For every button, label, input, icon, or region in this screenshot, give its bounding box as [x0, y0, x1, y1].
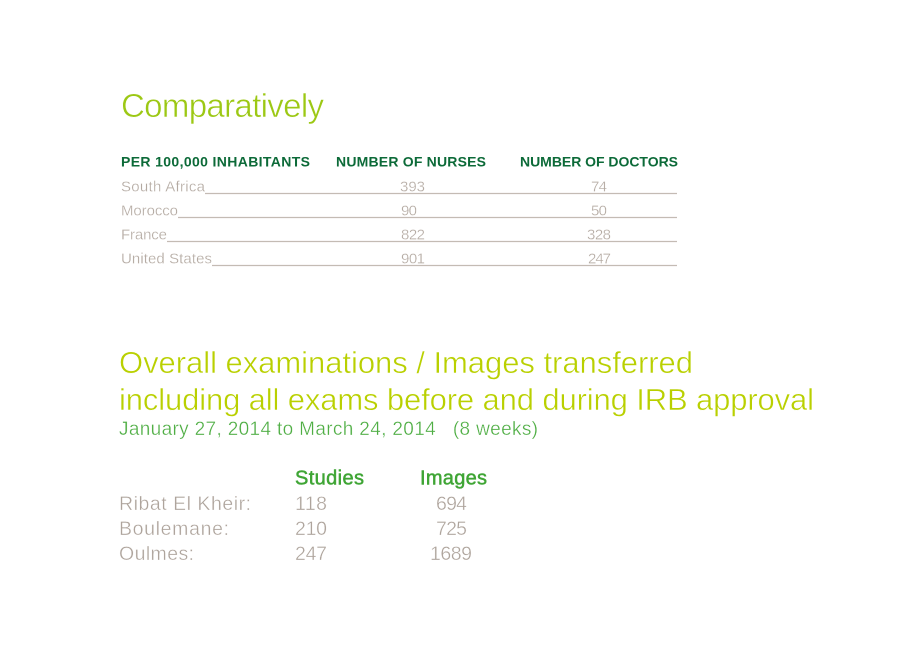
table header row: NUMBER OF NURSES	[336, 154, 486, 170]
row: United States: 247	[588, 250, 611, 268]
heading: overall examinations	[119, 345, 814, 417]
row: Morocco: 50	[591, 202, 607, 220]
row: Morocco	[121, 202, 677, 220]
row: South Africa	[121, 178, 677, 196]
row: Boulemane	[119, 518, 467, 540]
row: Oulmes: 247	[295, 543, 327, 565]
row: South Africa: 393	[400, 178, 425, 196]
table header row: NUMBER OF DOCTORS	[520, 154, 678, 170]
title: Comparatively: Comparatively	[121, 87, 324, 124]
table header row: Images	[420, 468, 487, 490]
table header row	[295, 468, 487, 490]
row: South Africa: 74	[591, 178, 607, 196]
row: Oulmes	[119, 543, 472, 565]
table: studies and images by site	[119, 468, 487, 565]
row: France: 822	[401, 226, 425, 244]
row: France	[121, 226, 677, 244]
table header row: PER 100,000 INHABITANTS	[121, 154, 310, 170]
row: United States: 901	[401, 250, 425, 268]
subheading: date range: January 27, 2014 to March 24, 2014 (8 weeks)	[119, 419, 538, 440]
row: Oulmes: 1689	[430, 543, 472, 565]
table header row: Studies	[295, 468, 364, 490]
row: Oulmes: Oulmes:	[119, 543, 194, 565]
row: Morocco: 90	[401, 202, 417, 220]
row: United States	[121, 250, 677, 268]
row: Ribat El Kheir	[119, 493, 467, 515]
row: Boulemane: 725	[436, 518, 467, 540]
row: France: 328	[587, 226, 611, 244]
row: Boulemane: 210	[295, 518, 327, 540]
row: South Africa: South Africa	[121, 178, 206, 196]
row: Ribat El Kheir: 694	[436, 493, 467, 515]
row: United States: United States	[121, 250, 212, 268]
row: Ribat El Kheir: Ribat El Kheir:	[119, 493, 251, 515]
row: France: France	[121, 226, 167, 244]
table: comparison per 100,000 inhabitants	[121, 154, 678, 268]
row: Ribat El Kheir: 118	[295, 493, 327, 515]
heading: overall examinations: including all exams before and during IRB approval	[119, 382, 814, 417]
table header row	[121, 154, 678, 170]
row: Morocco: Morocco	[121, 202, 178, 220]
heading: overall examinations: Overall examinations / Images transferred	[119, 345, 693, 380]
row: Boulemane: Boulemane:	[119, 518, 229, 540]
